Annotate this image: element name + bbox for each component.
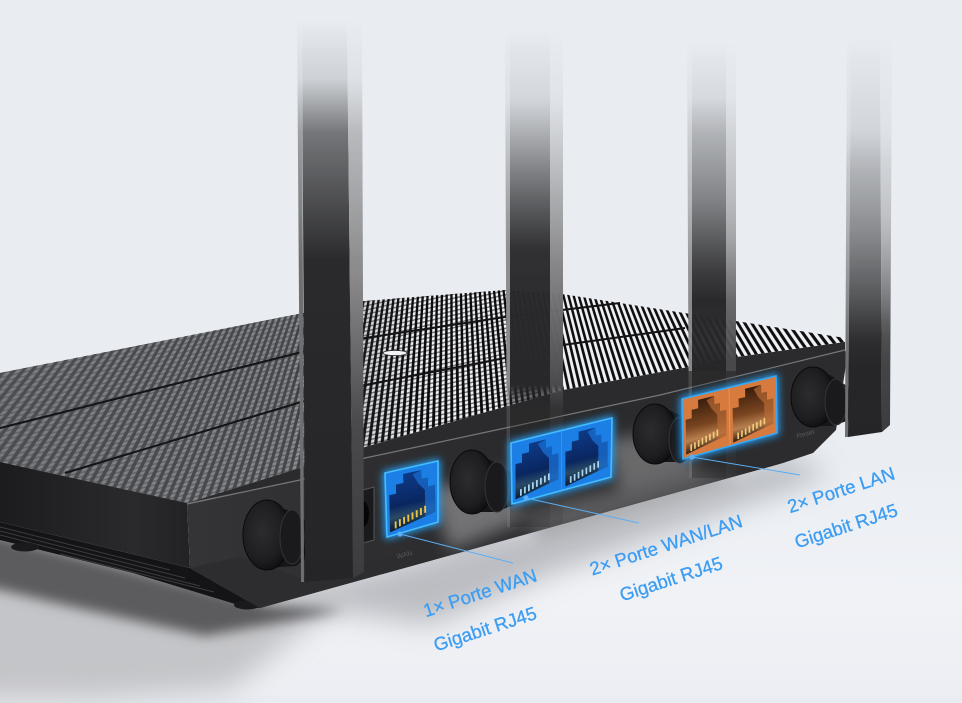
connector: antenna 1 xyxy=(243,500,310,570)
leader line: WAN/LAN xyxy=(523,495,639,523)
connector: antenna 3 xyxy=(633,404,694,464)
router top surface with dimpled pattern xyxy=(0,290,844,503)
antenna 2 xyxy=(505,20,563,527)
label: 1x Porte WAN: Gigabit RJ45 xyxy=(431,602,539,655)
router left side face xyxy=(0,462,190,568)
label: 1x Porte WAN xyxy=(421,565,539,655)
label: 2x Porte LAN: Gigabit RJ45 xyxy=(792,499,900,552)
router rear face xyxy=(187,350,847,608)
lower chin plate xyxy=(190,463,783,608)
top surface grooves and logo xyxy=(0,303,685,473)
label: 2x Porte WAN/LAN: Gigabit RJ45 xyxy=(617,552,725,605)
small printed label Reset: Reset xyxy=(796,429,815,440)
label: 1x Porte WAN: 1× Porte WAN xyxy=(421,565,539,621)
rear top edge highlight xyxy=(187,350,845,504)
connector: antenna 4 xyxy=(791,367,851,427)
port: 1x WAN (blue) xyxy=(385,461,438,537)
leader line: WAN xyxy=(397,531,513,563)
label: 2x Porte WAN/LAN: 2× Porte WAN/LAN xyxy=(587,510,745,579)
underside vent xyxy=(0,522,260,608)
label: 2x Porte LAN: 2× Porte LAN xyxy=(785,463,897,517)
connector: antenna 2 xyxy=(450,450,514,514)
antenna 3 xyxy=(687,40,736,478)
leader line: LAN xyxy=(689,454,800,475)
router feet xyxy=(11,542,260,610)
antenna 1 xyxy=(297,20,364,582)
label: 2x Porte LAN xyxy=(785,463,900,552)
light smears below ports xyxy=(430,430,740,550)
port: 2x LAN (orange) xyxy=(682,376,777,459)
small printed label WAN: WAN xyxy=(396,550,413,561)
antenna 4 xyxy=(845,40,892,437)
port: 2x WAN/LAN (blue) xyxy=(511,418,612,504)
rear edge trim xyxy=(187,342,845,503)
power port recess xyxy=(357,487,374,543)
